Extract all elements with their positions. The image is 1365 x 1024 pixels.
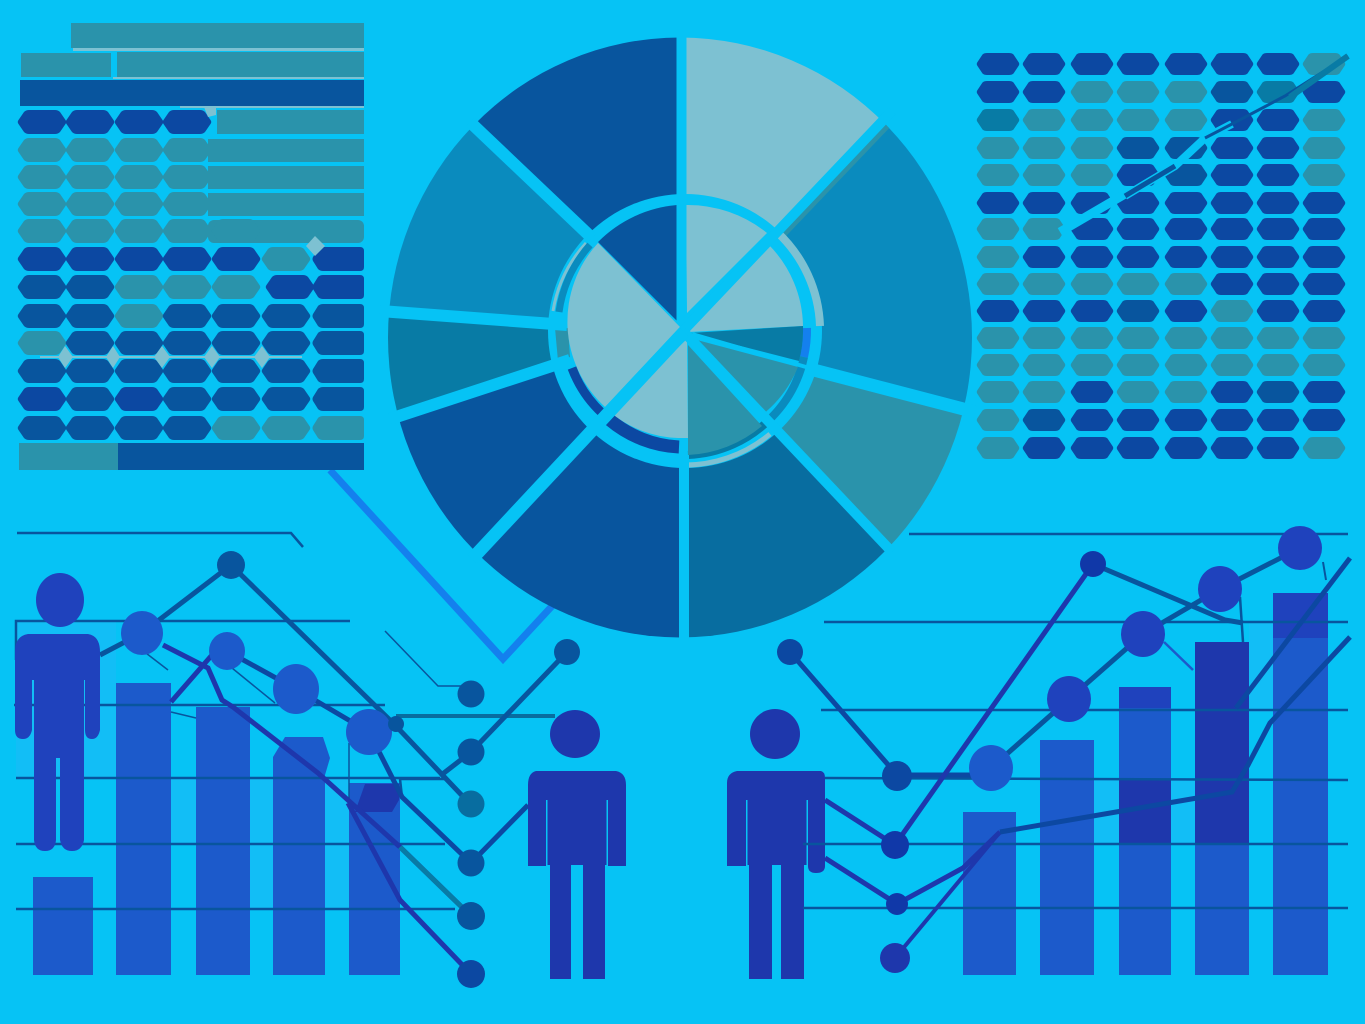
inner ring bands	[553, 232, 820, 465]
left bar chart	[33, 683, 400, 975]
left grid lines	[14, 533, 471, 909]
right grid lines	[803, 534, 1348, 908]
outer ring sectors	[388, 38, 972, 638]
panel: right grid	[977, 53, 1345, 459]
left line nodes	[121, 551, 580, 988]
left line series	[100, 565, 567, 974]
lighter chart backdrop panels	[16, 622, 1273, 908]
pie chart	[388, 38, 972, 638]
person: centre left	[528, 710, 626, 979]
person: centre right	[727, 709, 825, 979]
panel: left table	[18, 23, 364, 470]
right bar chart	[963, 593, 1328, 975]
person: far left	[15, 573, 100, 851]
inner pie sectors	[567, 205, 803, 455]
right line series	[790, 548, 1350, 958]
sector gaps	[380, 30, 975, 645]
right line nodes	[777, 526, 1322, 973]
callout connector	[330, 470, 553, 659]
trend line over right grid	[1060, 56, 1348, 232]
